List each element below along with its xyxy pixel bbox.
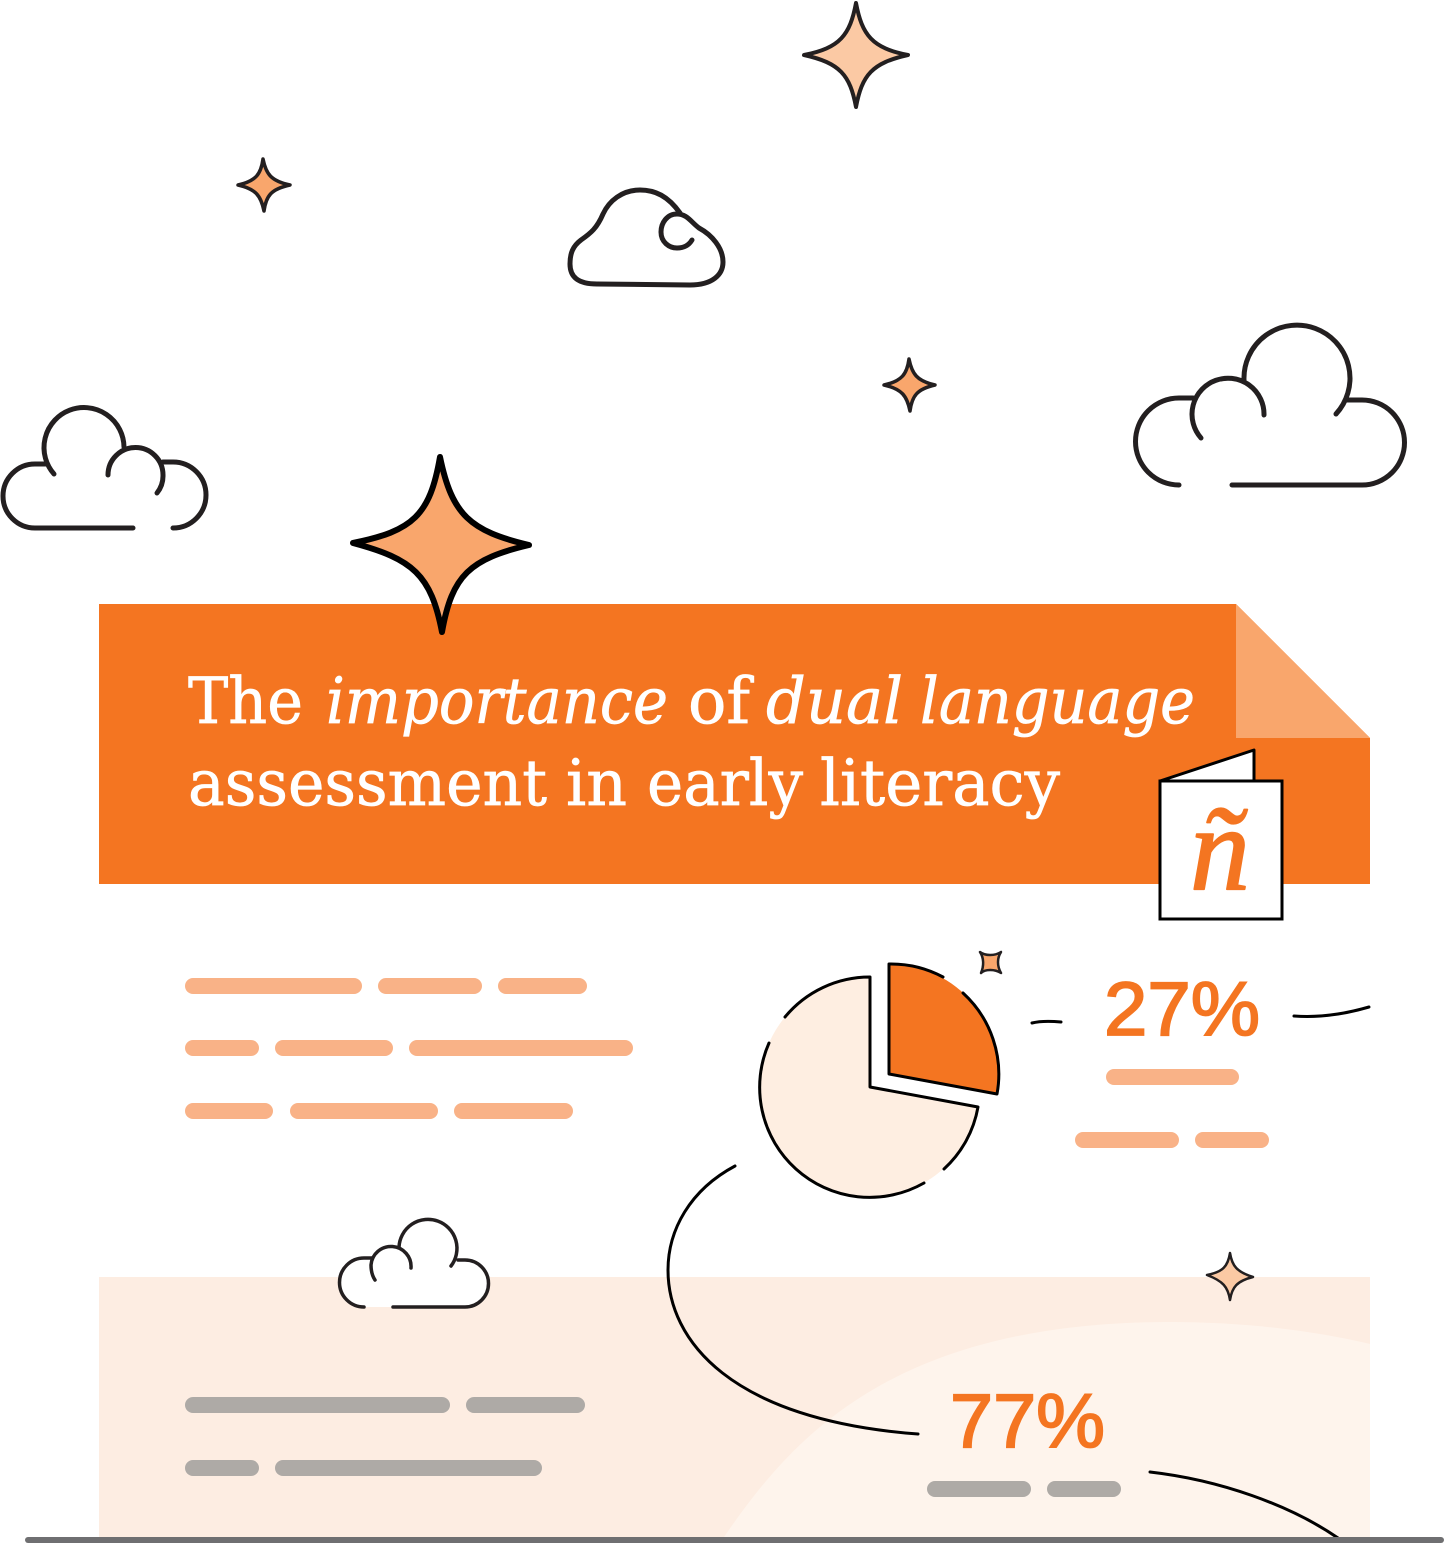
title: in	[566, 747, 627, 821]
icon: right cloud	[1136, 325, 1404, 485]
text placeholder: gray lines	[185, 1397, 1121, 1497]
title banner	[99, 604, 1370, 884]
title	[188, 665, 1195, 821]
title: The	[188, 665, 303, 739]
pie chart	[760, 964, 999, 1197]
connector dash right of 27 percent	[1294, 1007, 1369, 1017]
title: early	[647, 747, 803, 821]
icon: large star over banner	[353, 457, 529, 632]
icon: booklet with letter	[1160, 750, 1282, 919]
title: literacy	[820, 747, 1060, 821]
icon: small star right	[884, 359, 935, 411]
stat: 77 percent: 77%	[950, 1379, 1105, 1464]
icon: booklet with letter: ñ	[1190, 782, 1250, 915]
icon: large top star	[804, 3, 908, 107]
text placeholder: intro lines	[185, 978, 633, 1119]
title: assessment	[188, 747, 547, 821]
title: importance	[326, 665, 668, 739]
icon: small cloud	[340, 1219, 488, 1307]
panel: lower background	[99, 1277, 1370, 1540]
ground line	[25, 1537, 1444, 1543]
title: dual	[766, 665, 903, 739]
connector curve from pie to 77 percent	[668, 1166, 918, 1434]
icon: small star left	[238, 159, 290, 211]
icon: tiny star	[980, 952, 1001, 973]
title: language	[920, 665, 1195, 739]
icon: star on panel edge	[1207, 1253, 1253, 1300]
title: of	[688, 665, 754, 739]
connector curve right of 77 percent	[1150, 1472, 1338, 1538]
text placeholder: 27 percent caption	[1075, 1069, 1269, 1148]
pie: large slice	[760, 977, 978, 1197]
stat: 27 percent: 27%	[1104, 967, 1260, 1052]
pie: 27 percent slice	[889, 964, 999, 1094]
connector dash left of 27 percent	[1032, 1021, 1061, 1023]
icon: center cloud	[570, 190, 723, 285]
icon: left cloud	[3, 408, 206, 528]
